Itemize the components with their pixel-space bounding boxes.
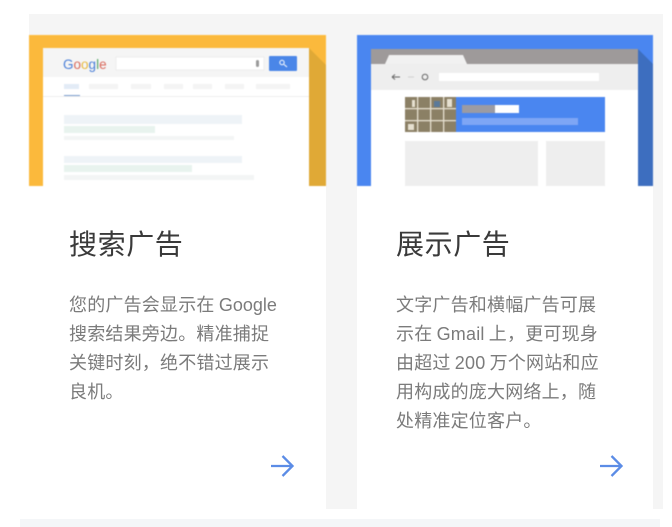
heading: display ads: 展示广告 <box>396 229 510 260</box>
panel: bottom strip <box>20 519 660 527</box>
text block: search ads description: 搜索结果旁边。精准捕捉 <box>69 324 269 344</box>
heading: search ads: 搜索广告 <box>69 229 183 260</box>
illustration: browser with display banner <box>356 34 654 187</box>
illustration: Google search results page: Google <box>63 57 107 72</box>
icon: arrow right <box>600 455 623 477</box>
text block: display ads description: 处精准定位客户。 <box>396 411 542 431</box>
text block: search ads description: 您的广告会显示在 Google <box>69 295 277 315</box>
panel: search ads card <box>29 35 326 509</box>
icon: arrow right <box>271 455 294 477</box>
panel: display ads card <box>357 35 653 509</box>
text block: display ads description: 示在 Gmail 上，更可现身 <box>396 324 598 344</box>
text block: display ads description <box>396 295 599 431</box>
text block: display ads description: 文字广告和横幅广告可展 <box>396 295 596 315</box>
text block: search ads description: 关键时刻，绝不错过展示 <box>69 353 269 373</box>
illustration: Google search results page <box>28 34 327 187</box>
text block: display ads description: 由超过 200 万个网站和应 <box>396 353 599 373</box>
text block: search ads description: 良机。 <box>69 382 124 402</box>
text block: search ads description <box>69 295 277 402</box>
text block: display ads description: 用构成的庞大网络上，随 <box>396 382 596 402</box>
